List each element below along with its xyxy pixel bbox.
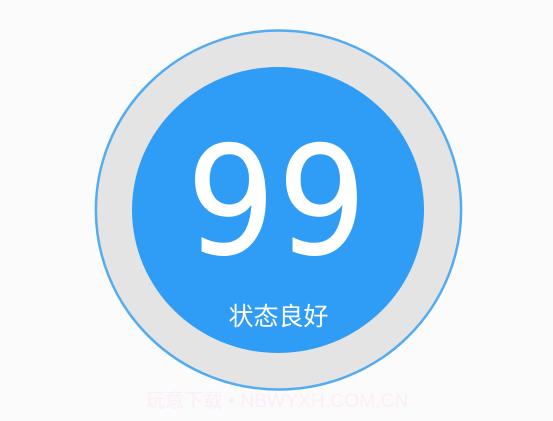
- status label: 状态良好: [228, 303, 329, 331]
- inner blue disc: [132, 67, 424, 353]
- watermark: 玩意下载 • NBWYXH.COM.CN: [146, 390, 408, 412]
- score number: 99: [187, 116, 369, 290]
- outer ring: [96, 30, 461, 390]
